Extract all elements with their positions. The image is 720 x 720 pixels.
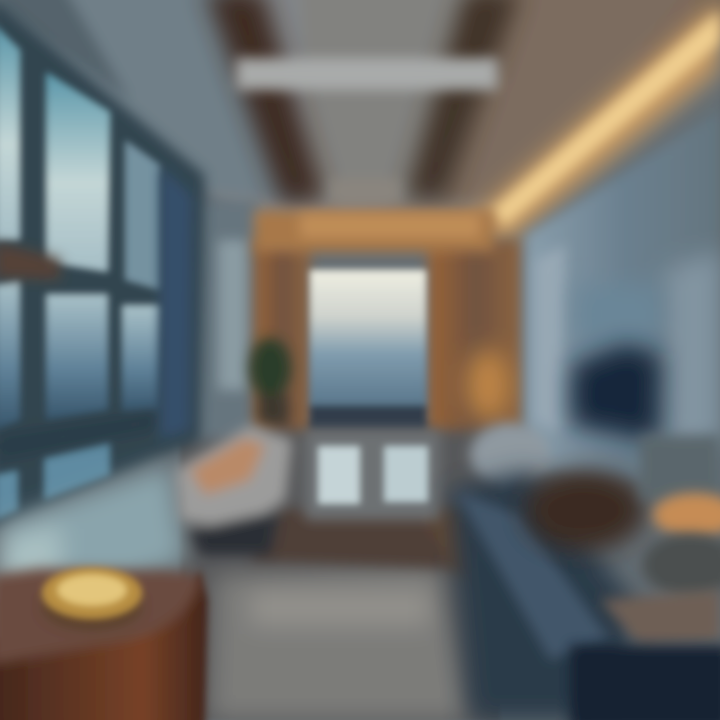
floor by the window xyxy=(0,465,185,610)
center window xyxy=(310,270,426,429)
white sofa xyxy=(175,425,292,555)
wall painting xyxy=(572,345,660,440)
right wall xyxy=(525,110,720,490)
left wall-to-wall window xyxy=(0,0,205,530)
ceiling beams xyxy=(205,0,520,205)
right foreground table and lamp xyxy=(570,435,720,720)
wooden floor strip xyxy=(250,505,500,590)
plant xyxy=(249,338,291,425)
round wooden table xyxy=(0,568,208,720)
right sofa and cushions xyxy=(450,423,645,720)
far wall and wood pillars xyxy=(190,200,522,440)
golden bowl on table xyxy=(42,567,142,630)
glowing ceiling light strip xyxy=(465,0,720,245)
ceiling xyxy=(0,0,720,225)
rug xyxy=(210,565,470,720)
white chairs xyxy=(305,430,440,520)
